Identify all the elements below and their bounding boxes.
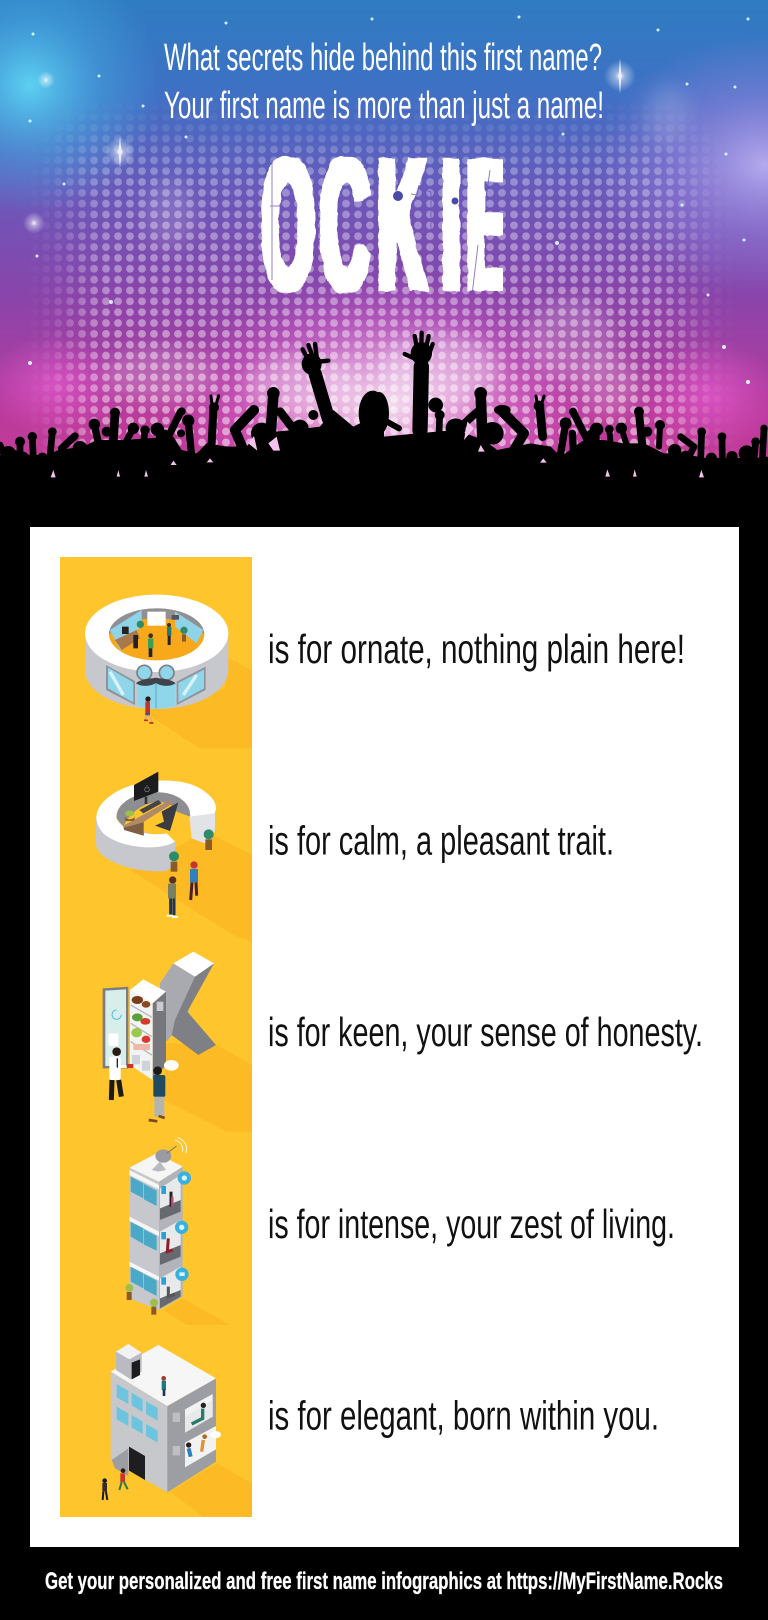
header: concert background [0, 0, 768, 535]
sparkles and stars [23, 16, 750, 384]
yellow illustration column [60, 557, 252, 1517]
icon: mustache ring building [85, 595, 252, 748]
icon: reception desk [96, 772, 252, 942]
crowd silhouette [0, 333, 768, 528]
icon: K sculpture and fridge [103, 952, 252, 1132]
white content panel [30, 527, 739, 1547]
icon: tower with satellite dish [125, 1137, 230, 1325]
title: first name: OCKIE [262, 119, 511, 331]
text: C row: is for calm, a pleasant trait. [268, 818, 614, 864]
icon: office building with balconies [102, 1344, 252, 1517]
title: tagline [164, 37, 604, 127]
